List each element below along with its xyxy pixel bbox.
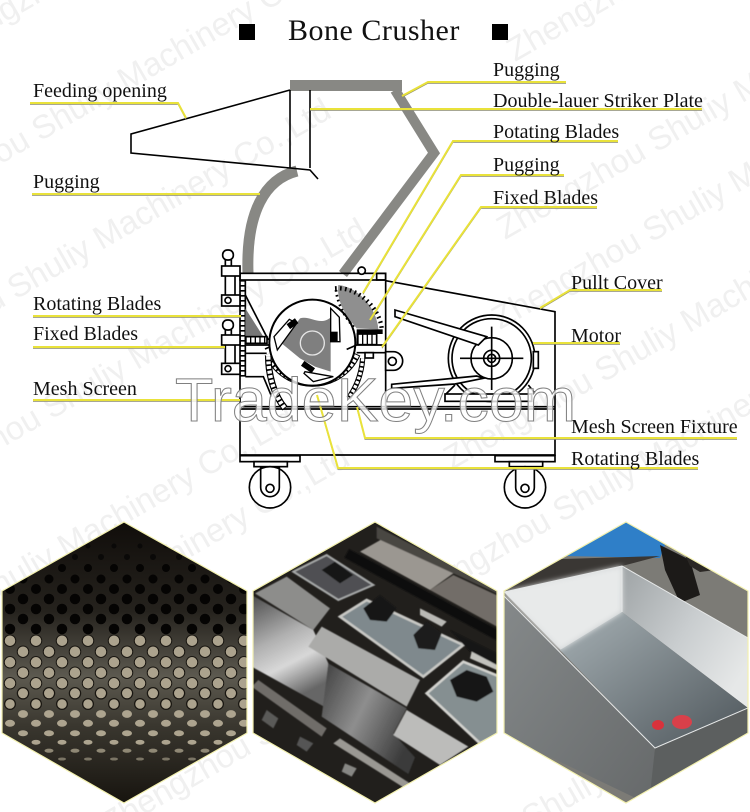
hopper front face [504, 596, 655, 805]
left blade [255, 577, 330, 630]
label: Pugging right: Pugging [493, 154, 560, 176]
left clamps [222, 250, 240, 374]
rotor [269, 300, 355, 386]
crusher diagram [131, 80, 555, 508]
leader: pullt cover [540, 290, 662, 308]
title text: Bone Crusher [288, 14, 460, 47]
label: Potating Blades: Potating Blades [493, 121, 619, 143]
perforation holes: flattened lower rows [10, 714, 250, 759]
lug [386, 352, 403, 370]
leader: pugging left [32, 193, 260, 195]
top-left plate [293, 555, 373, 600]
label: Pugging top: Pugging [493, 59, 560, 81]
label: Mesh Screen: Mesh Screen [33, 378, 137, 400]
screen arcs [268, 354, 363, 408]
leader lines [30, 82, 737, 469]
label: Mesh Screen Fixture: Mesh Screen Fixture [571, 416, 738, 438]
left metal sheet [252, 595, 328, 707]
leader: rotating blades right [317, 395, 698, 468]
leader: mesh screen left [33, 399, 240, 401]
machine body [222, 250, 555, 508]
photo: mesh screen [0, 520, 250, 805]
hopper edges [504, 566, 748, 748]
watermark: Zhengzhou Shuliy Machinery: Machinery Co.,Ltd [105, 438, 355, 604]
hopper photo border [504, 522, 748, 803]
blades photo border [253, 522, 497, 803]
centre blade [308, 627, 420, 707]
centre plate [340, 600, 463, 677]
centre metal sheet [322, 663, 415, 774]
top fixed striker with teeth [335, 285, 386, 358]
motor and belt [392, 310, 538, 402]
red caps [652, 715, 692, 730]
lower rails [252, 680, 327, 737]
photo: galvanized hopper [500, 520, 750, 805]
photo: rotating blades [250, 520, 500, 805]
background: blue machine and dark frame [504, 520, 715, 603]
rotating blade cutters [274, 308, 340, 382]
right plate [427, 662, 500, 743]
label: Pugging left: Pugging [33, 171, 100, 193]
icon: right square [492, 24, 508, 40]
label: Fixed Blades left: Fixed Blades [33, 323, 138, 345]
TradeKey watermark: TradeKey.com [175, 366, 576, 434]
left fixed blade [245, 295, 274, 397]
leader: motor [533, 342, 620, 344]
leader: feeding opening [30, 103, 186, 118]
label: Pullt Cover: Pullt Cover [571, 272, 663, 294]
feeding hopper [131, 90, 318, 179]
leader: potating blades [363, 141, 618, 293]
title [239, 14, 508, 47]
label: Feeding opening: Feeding opening [33, 80, 167, 102]
label: Double-lauer Striker Plate: Double-lauer Striker Plate [493, 90, 703, 112]
mesh photo border [2, 522, 247, 803]
icon: left square [239, 24, 255, 40]
pugging: grey insulation outline [248, 80, 434, 274]
leader: fixed blades right [382, 207, 597, 347]
hopper interior [504, 566, 622, 650]
leader: striker plate [310, 108, 702, 110]
label: Rotating Blades right: Rotating Blades [571, 448, 700, 470]
frame [240, 267, 555, 467]
right blade [393, 710, 468, 765]
label: Rotating Blades left: Rotating Blades [33, 293, 162, 315]
leader: fixed blades left [33, 346, 225, 348]
upper blade [360, 538, 453, 590]
part labels [33, 59, 738, 470]
label: Motor: Motor [571, 325, 621, 347]
perforation holes: lit middle rows [10, 641, 250, 704]
lug hole [388, 357, 396, 365]
label: Fixed Blades right: Fixed Blades [493, 187, 598, 209]
wheels [249, 467, 546, 508]
leader: rotating blades left [33, 315, 241, 317]
leader: pugging top [402, 82, 566, 96]
leader: pugging right [370, 175, 564, 320]
leader: mesh screen fixture [357, 407, 737, 438]
perforation holes: dark upper rows [10, 546, 250, 629]
